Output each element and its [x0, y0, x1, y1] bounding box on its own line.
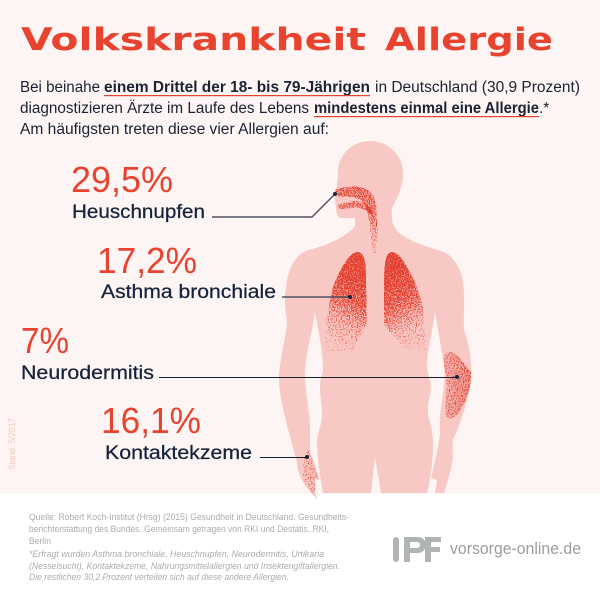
intro text: einem Drittel der 18- bis 79-Jährigen: [104, 79, 370, 96]
stat: Heuschnupfen: 29,5%: [71, 159, 173, 200]
source text: Berlin: [29, 536, 51, 547]
stat: Asthma bronchiale: Asthma bronchiale: [101, 282, 276, 303]
human body silhouette: [279, 141, 471, 499]
logo: IPF: [393, 537, 441, 562]
footnote: *Erfragt wurden Asthma bronchiale, Heuschnupfen, Neurodermitis, Urtikaria: [29, 549, 324, 560]
date note: Stand: 5/2017: [7, 418, 17, 470]
intro text: [20, 79, 580, 138]
footnote: (Nesselsucht), Kontaktekzeme, Nahrungsmittelallergien und Insektengiftallergien.: [29, 561, 340, 572]
forearm eczema: [444, 352, 471, 418]
intro text: .*: [539, 100, 549, 117]
logo: website: vorsorge-online.de: [450, 539, 581, 558]
nasal passage and throat: [335, 186, 378, 253]
title: Allergie: [385, 22, 553, 58]
intro text: Am häufigsten treten diese vier Allergien auf:: [20, 121, 329, 138]
intro text: in Deutschland (30,9 Prozent): [375, 79, 580, 96]
footnote: Die restlichen 30,2 Prozent verteilen sich auf diese andere Allergien.: [29, 572, 289, 583]
title: Volkskrankheit: [21, 22, 366, 58]
left lung: [325, 252, 367, 352]
intro text: Bei beinahe: [20, 79, 100, 96]
stat: Kontaktekzeme: 16,1%: [101, 400, 201, 441]
stat: Heuschnupfen: [71, 159, 337, 223]
forearm eczema tint: [444, 352, 471, 418]
stippled allergy zones: [303, 186, 471, 494]
footnote: [29, 549, 340, 583]
intro text: mindestens einmal eine Allergie: [314, 100, 539, 117]
stat: Asthma bronchiale: [97, 240, 352, 303]
stat: Kontaktekzeme: [101, 400, 309, 464]
stat: Neurodermitis: [21, 320, 459, 384]
hand eczema: [303, 450, 319, 494]
source text: berichterstattung des Bundes. Gemeinsam getragen von RKI und Destatis. RKI,: [29, 524, 329, 535]
mouth passage: [337, 201, 373, 216]
right lung: [384, 252, 426, 350]
stat: Asthma bronchiale: 17,2%: [97, 240, 197, 281]
source text: [29, 512, 349, 547]
stat: Neurodermitis: 7%: [21, 320, 69, 361]
stat: Kontaktekzeme: Kontaktekzeme: [105, 443, 252, 464]
stat: Neurodermitis: Neurodermitis: [21, 363, 154, 384]
stat: Heuschnupfen: Heuschnupfen: [72, 202, 205, 223]
intro text: diagnostizieren Ärzte im Laufe des Lebens: [20, 100, 309, 117]
title: [21, 22, 553, 58]
source text: Quelle: Robert Koch-Institut (Hrsg) (2015) Gesundheit in Deutschland. Gesundheits-: [29, 512, 349, 523]
